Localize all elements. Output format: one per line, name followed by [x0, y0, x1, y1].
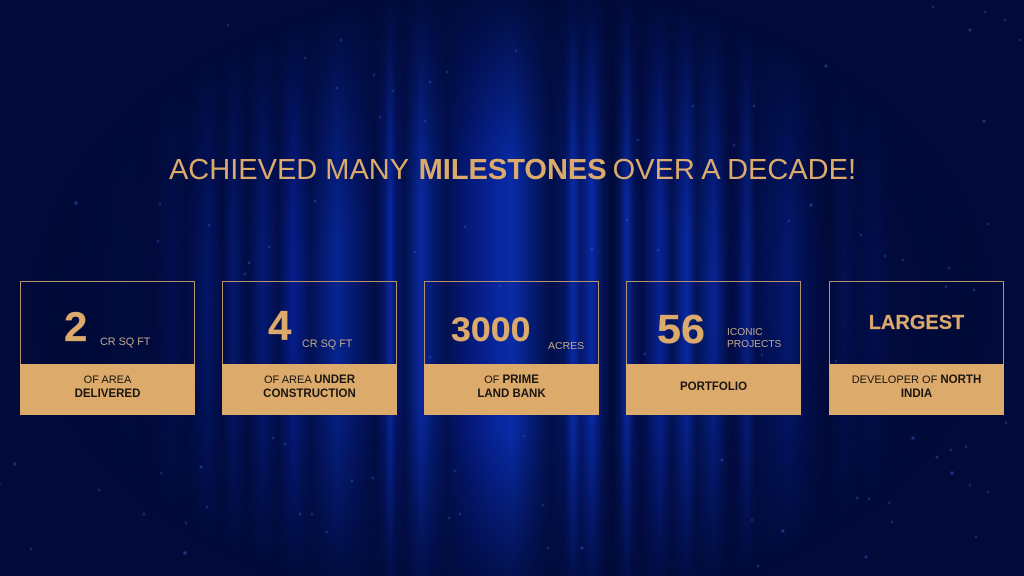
label: of area delivered: OF AREA — [84, 374, 131, 386]
number: 4: 4 — [268, 302, 291, 349]
unit: iconic projects — [727, 327, 781, 350]
unit: iconic projects: ICONIC — [727, 327, 763, 338]
number: largest: LARGEST — [869, 312, 964, 334]
number: 56: 56 — [657, 306, 705, 352]
label: of area under construction: OF AREA UNDER — [264, 374, 355, 386]
label: of area under construction: CONSTRUCTION — [263, 388, 356, 400]
card: 4 cr sq ft — [222, 281, 397, 415]
unit: iconic projects: PROJECTS — [727, 339, 781, 350]
label: of area under construction — [222, 364, 397, 415]
label: of prime land bank — [424, 364, 599, 415]
label: of prime land bank: OF PRIME — [484, 374, 539, 386]
label: developer of north india: DEVELOPER OF NORTH — [852, 374, 981, 386]
card: largest developer — [829, 281, 1004, 415]
title: ACHIEVED MANY MILESTONES OVER A DECADE! — [169, 154, 856, 186]
label: of area delivered — [20, 364, 195, 415]
label: of prime land bank: LAND BANK — [477, 388, 546, 400]
label: portfolio: PORTFOLIO — [680, 381, 747, 393]
unit: cr sq ft: CR SQ FT — [302, 338, 352, 350]
label: of area delivered: DELIVERED — [75, 388, 140, 400]
card: 3000 acres — [424, 281, 599, 415]
label: developer of north india — [829, 364, 1004, 415]
number: 2: 2 — [64, 303, 87, 350]
unit: acres: ACRES — [548, 340, 584, 352]
number: 3000: 3000 — [451, 311, 530, 349]
card: 56 iconic projects — [626, 281, 801, 415]
label: portfolio — [626, 364, 801, 415]
label: developer of north india: INDIA — [901, 388, 932, 400]
unit: cr sq ft: CR SQ FT — [100, 336, 150, 348]
card: 2 cr sq ft — [20, 281, 195, 415]
